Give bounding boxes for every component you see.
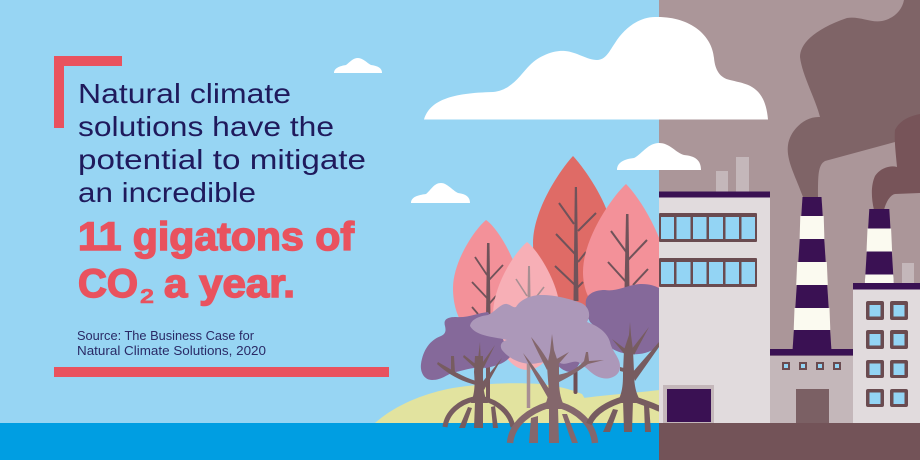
highlighted statistic: 2 xyxy=(140,286,154,308)
background tree stems xyxy=(488,360,576,408)
red bottom bar xyxy=(54,367,389,377)
polluted sky background xyxy=(659,0,920,460)
source text: Natural Climate Solutions, 2020 xyxy=(77,344,266,358)
sky background xyxy=(0,0,660,460)
door middle xyxy=(796,389,829,423)
highlighted statistic: CO xyxy=(78,262,138,306)
window band upper xyxy=(659,213,757,242)
door main xyxy=(663,385,714,423)
intro text: Natural climate xyxy=(78,78,291,109)
tree: light pink leaf tree xyxy=(493,242,560,370)
smoke plume: large xyxy=(788,0,920,197)
factory ground xyxy=(659,423,920,460)
hills xyxy=(375,383,660,423)
window frames xyxy=(866,301,908,407)
mangrove canopy: left xyxy=(421,312,510,380)
smoke plume: small xyxy=(872,114,920,210)
intro text: solutions have the xyxy=(78,111,334,142)
mangrove: center trunk and roots xyxy=(510,334,604,443)
mangrove: left trunk and roots xyxy=(437,342,513,428)
building: right xyxy=(853,283,920,423)
building: middle xyxy=(770,349,853,423)
big cloud xyxy=(424,17,768,119)
mangrove: right trunk and roots xyxy=(589,322,660,432)
source text: Source: The Business Case for xyxy=(77,329,254,343)
red bracket top left xyxy=(54,56,122,128)
background stacks xyxy=(716,157,914,283)
small windows xyxy=(783,363,840,369)
tree: left pink leaf tree xyxy=(453,220,520,340)
mangrove canopy: dark patch behind center xyxy=(552,355,585,372)
tree: right pink leaf tree xyxy=(583,184,660,320)
highlighted statistic xyxy=(78,215,355,308)
mangrove canopy: right xyxy=(586,284,659,354)
window panes xyxy=(870,305,904,404)
intro text: potential to mitigate xyxy=(78,144,366,175)
tree: red leaf tree xyxy=(533,156,614,310)
source text xyxy=(77,329,266,358)
chimney: short xyxy=(865,209,894,284)
building: main xyxy=(659,192,770,423)
clouds small xyxy=(334,58,470,203)
window band lower xyxy=(659,258,757,287)
intro text: an incredible xyxy=(78,177,256,208)
intro text xyxy=(78,78,366,208)
mangrove canopy: center xyxy=(470,295,620,379)
chimney: tall xyxy=(792,197,832,351)
water xyxy=(0,423,659,460)
cloud over divide xyxy=(617,143,701,170)
highlighted statistic: 11 gigatons of xyxy=(78,215,355,259)
highlighted statistic: a year. xyxy=(164,262,295,306)
